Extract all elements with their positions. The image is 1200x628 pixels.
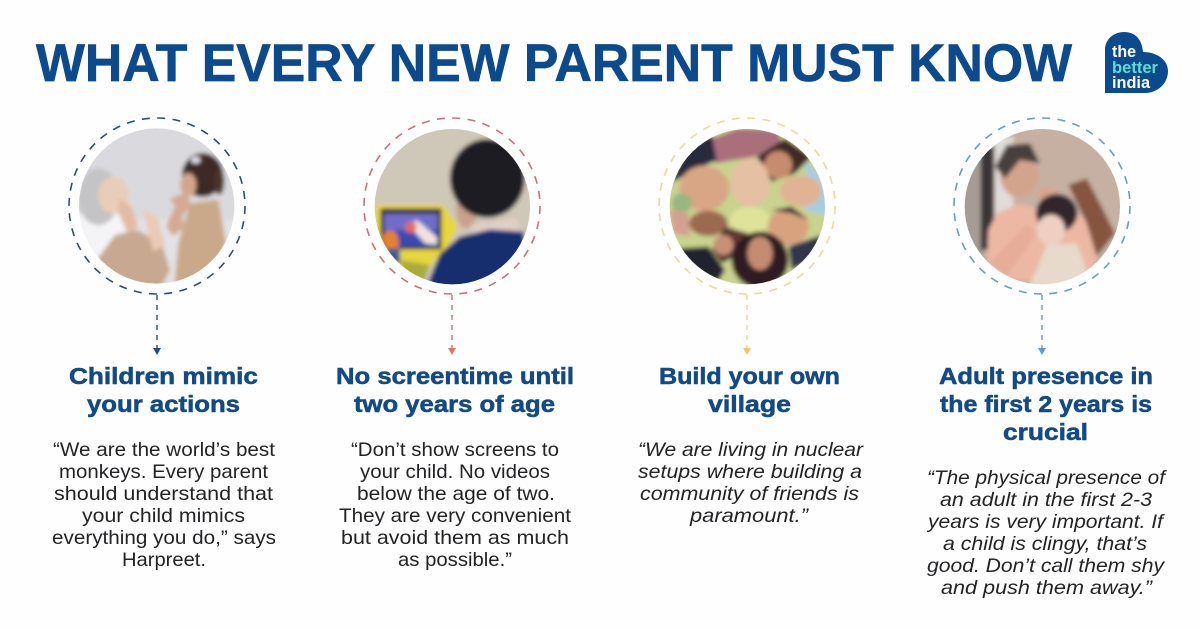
quote: below the age of two. xyxy=(357,483,555,505)
photo: mother and daughter mimicking xyxy=(79,128,234,284)
quote: your child. No videos xyxy=(360,461,550,483)
quote xyxy=(926,467,1168,599)
heading xyxy=(69,363,258,417)
quote: paramount.” xyxy=(689,505,810,527)
quote: everything you do,” says xyxy=(52,527,276,549)
quote: an adult in the first 2-3 xyxy=(940,489,1152,511)
dashed ring xyxy=(364,118,540,294)
quote: should understand that xyxy=(54,483,274,505)
quote xyxy=(52,439,276,571)
panel: adult presence xyxy=(926,118,1168,599)
photo: father with baby xyxy=(964,129,1120,284)
logo: the better india: better xyxy=(1112,58,1158,77)
quote: They are very convenient xyxy=(339,505,572,527)
quote: “The physical presence of xyxy=(927,467,1168,489)
arrow xyxy=(743,295,751,355)
heading: the first 2 years is xyxy=(940,391,1152,417)
heading: Children mimic xyxy=(69,363,258,389)
heading xyxy=(659,363,840,417)
heading: village xyxy=(708,391,791,417)
panel: no screentime until two xyxy=(336,118,574,571)
logo: the better india: india xyxy=(1112,73,1151,92)
quote xyxy=(339,439,572,571)
quote: community of friends is xyxy=(640,483,859,505)
photo: group huddle seen from below xyxy=(670,129,825,284)
logo: the better india xyxy=(1105,32,1168,93)
quote: “Don’t show screens to xyxy=(351,439,559,461)
heading xyxy=(939,363,1153,445)
heading: crucial xyxy=(1003,419,1088,445)
arrow xyxy=(1038,295,1046,355)
quote: and push them away.” xyxy=(941,577,1154,599)
quote: your child mimics xyxy=(82,505,245,527)
heading: Adult presence in xyxy=(939,363,1153,389)
quote: as possible.” xyxy=(398,549,512,571)
quote: years is very important. If xyxy=(926,511,1166,533)
panel: children mimic your actions xyxy=(52,118,276,571)
quote xyxy=(638,439,865,527)
heading: two years of age xyxy=(354,391,555,417)
panel: build your own village xyxy=(638,118,865,527)
arrow xyxy=(448,295,456,355)
quote: monkeys. Every parent xyxy=(59,461,269,483)
quote: “We are living in nuclear xyxy=(638,439,865,461)
heading: your actions xyxy=(87,391,240,417)
dashed ring xyxy=(954,118,1130,294)
dashed ring xyxy=(69,118,245,294)
heading: Build your own xyxy=(659,363,840,389)
logo: the better india: the xyxy=(1112,42,1136,61)
heading xyxy=(336,363,574,417)
quote: a child is clingy, that’s xyxy=(943,533,1147,555)
quote: Harpreet. xyxy=(122,549,206,571)
quote: good. Don’t call them shy xyxy=(927,555,1165,577)
quote: setups where building a xyxy=(638,461,862,483)
heading: No screentime until xyxy=(336,363,574,389)
arrow xyxy=(153,295,161,355)
photo: child watching a tablet xyxy=(374,129,530,284)
title: WHAT EVERY NEW PARENT MUST KNOW xyxy=(36,34,1072,93)
quote: but avoid them as much xyxy=(341,527,569,549)
dashed ring xyxy=(659,118,835,294)
quote: “We are the world’s best xyxy=(53,439,276,461)
